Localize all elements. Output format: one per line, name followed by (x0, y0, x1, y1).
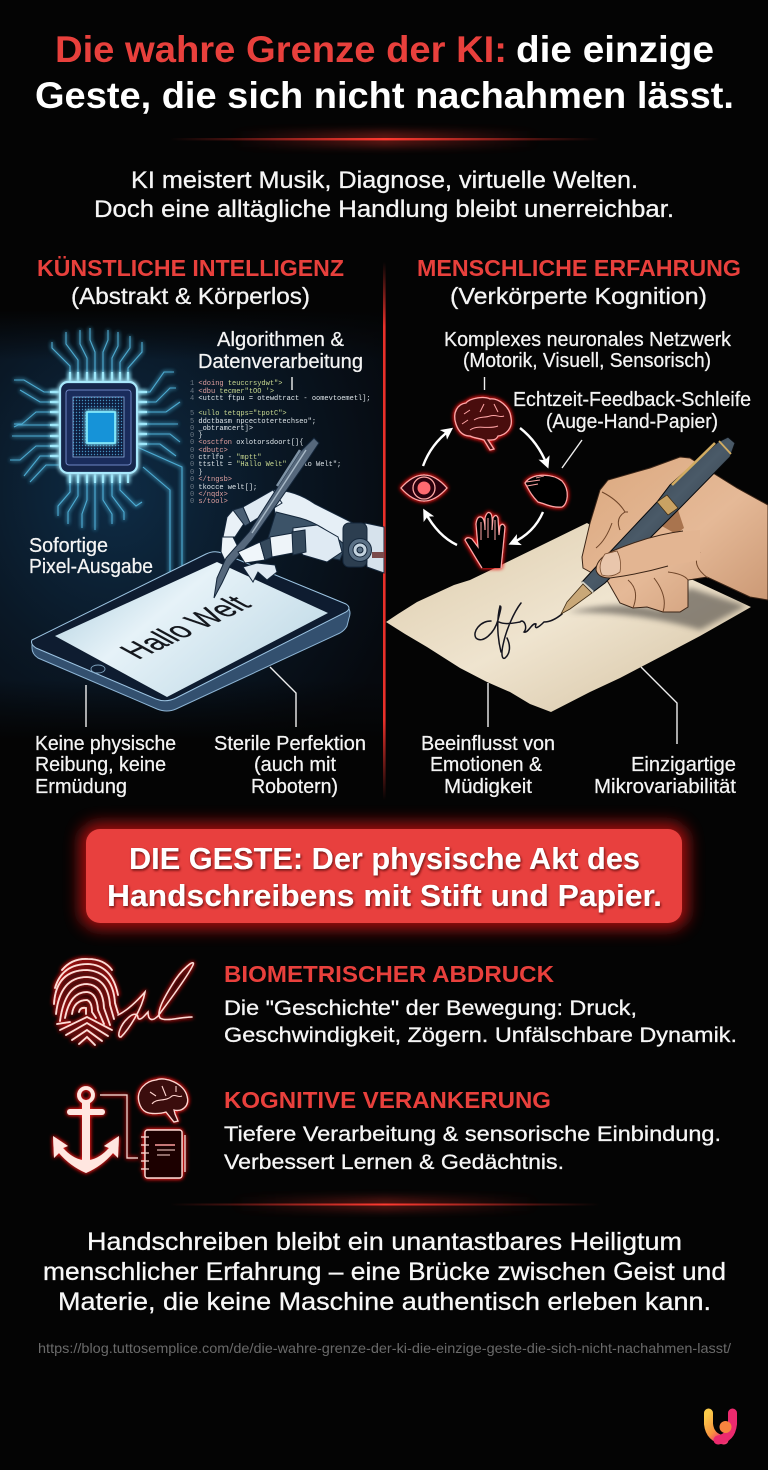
label: feedback loop: Echtzeit-Feedback-Schleife (513, 389, 751, 411)
label: no friction: Reibung, keine (35, 754, 166, 776)
logo (708, 1413, 732, 1440)
intro text: KI meistert Musik, Diagnose, virtuelle Welten. (131, 167, 638, 194)
label: algorithms: Algorithmen & (217, 329, 345, 351)
label: sterile perfection (214, 733, 366, 798)
intro text (94, 167, 674, 223)
code block: 0 <osctfon oxlotorsdoort[]{ (190, 439, 303, 447)
intro text: Doch eine alltägliche Handlung bleibt unerreichbar. (94, 196, 674, 223)
callout: the gesture: Handschreibens mit Stift und Papier. (107, 878, 662, 913)
title: Die wahre Grenze der KI: (55, 29, 507, 70)
section: cognitive anchoring (224, 1087, 721, 1174)
tablet text: Hallo Welt (111, 591, 259, 664)
label: micro variability: Einzigartige (631, 754, 736, 776)
code block: 0 } (190, 432, 203, 440)
stylus (214, 438, 319, 598)
code block: 4 <dbu tecmer"tOO '> (190, 388, 274, 396)
code block: 0 </nqdx> (190, 491, 228, 499)
closing statement: Handschreiben bleibt ein unantastbares Heiligtum (87, 1228, 682, 1256)
source url: https://blog.tuttosemplice.com/de/die-wahre-grenze-der-ki-die-einzige-geste-die-sich-nicht-nachahmen-lasst/ (38, 1340, 731, 1356)
label: emotions: Emotionen & (430, 754, 543, 776)
label: no friction: Ermüdung (35, 776, 127, 798)
heading: artificial intelligence (37, 255, 344, 309)
section: cognitive anchoring: Tiefere Verarbeitung & sensorische Einbindung. (224, 1123, 721, 1146)
section: biometric imprint: BIOMETRISCHER ABDRUCK (224, 961, 554, 987)
index finger (243, 490, 282, 523)
illustration: human hand with fountain pen (561, 437, 768, 614)
label: no friction (35, 733, 176, 798)
icon: glowing microchip (10, 328, 182, 583)
leader lines (86, 377, 677, 744)
palm plate (293, 525, 342, 562)
icon: fingerprint and signature (54, 959, 193, 1045)
code block: 5 ddctbasm npcectotertechseo"; (190, 418, 316, 426)
code block: 0 ttstlt = "Hallo Welt" :ullo Welt"; (190, 461, 341, 469)
title divider (170, 131, 600, 147)
section: cognitive anchoring: KOGNITIVE VERANKERUNG (224, 1087, 551, 1113)
thumb (596, 530, 700, 578)
heading: human experience: (Verkörperte Kognition) (450, 283, 707, 309)
chip pins (50, 372, 147, 483)
section: biometric imprint: Die "Geschichte" der Bewegung: Druck, (224, 997, 637, 1020)
code block: 0 } (190, 469, 203, 477)
label: emotions: Müdigkeit (444, 776, 532, 798)
panel: AI illustration background (0, 310, 383, 740)
label: feedback loop: (Auge-Hand-Papier) (546, 411, 718, 433)
heading: human experience: MENSCHLICHE ERFAHRUNG (417, 255, 741, 281)
label: pixel output: Pixel-Ausgabe (29, 556, 153, 578)
callout: the gesture (80, 823, 688, 929)
code block: 4 <utctt ftpu = otewdtract - oomevtoemetl]; (190, 395, 371, 403)
center vertical divider (383, 262, 386, 800)
closing statement: menschlicher Erfahrung – eine Brücke zwischen Geist und (43, 1258, 726, 1286)
code block: 0 tkocce welt[]; (190, 484, 257, 492)
label: neural network: (Motorik, Visuell, Sensorisch) (463, 350, 711, 372)
section: biometric imprint (224, 961, 737, 1047)
title: Geste, die sich nicht nachahmen lässt. (35, 75, 734, 116)
label: emotions (421, 733, 555, 798)
illustration: tablet with Hallo Welt (32, 552, 350, 711)
label: sterile perfection: Robotern) (251, 776, 338, 798)
code block: 0 _obtramcert]> (190, 425, 253, 433)
heading: human experience (417, 255, 741, 309)
icon: neon eye (401, 475, 447, 501)
code block: 0 s/tool> (190, 498, 228, 506)
label: algorithms (198, 329, 363, 373)
pen barrel (582, 437, 735, 592)
label: algorithms: Datenverarbeitung (198, 351, 363, 373)
label: feedback loop (513, 389, 751, 433)
illustration: torn paper with handwriting (386, 523, 751, 712)
heading: artificial intelligence: KÜNSTLICHE INTELLIGENZ (37, 255, 344, 281)
label: micro variability: Mikrovariabilität (594, 776, 736, 798)
label: pixel output: Sofortige (29, 535, 108, 557)
code block (190, 380, 371, 506)
heading: artificial intelligence: (Abstrakt & Körperlos) (71, 283, 310, 309)
title (35, 29, 734, 116)
label: emotions: Beeinflusst von (421, 733, 555, 755)
closing statement: Materie, die keine Maschine authentisch erleben kann. (58, 1288, 711, 1316)
label: micro variability (594, 754, 736, 798)
lower fingers (243, 563, 277, 582)
icon: neon tactile paper fragment (525, 475, 567, 507)
code block: 0 ctrlfo - "mptt" (190, 454, 261, 462)
label: no friction: Keine physische (35, 733, 176, 755)
forearm and wrist (365, 523, 384, 573)
label: sterile perfection: (auch mit (254, 754, 336, 776)
icon: neon hand (465, 513, 505, 568)
icon: neon brain (455, 398, 511, 450)
back of hand (273, 490, 353, 548)
label: neural network: Komplexes neuronales Netzwerk (444, 329, 732, 351)
icon: anchor, brain and notebook (53, 1079, 188, 1178)
illustration: robot hand with stylus (214, 438, 384, 598)
closing statement (43, 1228, 726, 1316)
signature (475, 603, 562, 658)
code block: 5 <ullo tetqps="tpotC"> (190, 410, 287, 418)
label: neural network (444, 329, 732, 372)
middle finger (238, 542, 265, 563)
lower divider (170, 1197, 600, 1211)
callout: the gesture: DIE GESTE: Der physische Akt des (129, 841, 640, 876)
feedback loop arrows (423, 428, 547, 545)
section: cognitive anchoring: Verbessert Lernen & Gedächtnis. (224, 1151, 564, 1174)
label: pixel output (29, 535, 153, 578)
code block: 1 <doing teuccrsydwt"> (190, 380, 282, 388)
code block: 0 <dbutc> (190, 447, 228, 455)
title: die einzige (516, 29, 714, 70)
section: biometric imprint: Geschwindigkeit, Zögern. Unfälschbare Dynamik. (224, 1024, 737, 1047)
code block: 0 </tngsb> (190, 476, 232, 484)
pen nib (561, 584, 592, 614)
label: sterile perfection: Sterile Perfektion (214, 733, 366, 755)
